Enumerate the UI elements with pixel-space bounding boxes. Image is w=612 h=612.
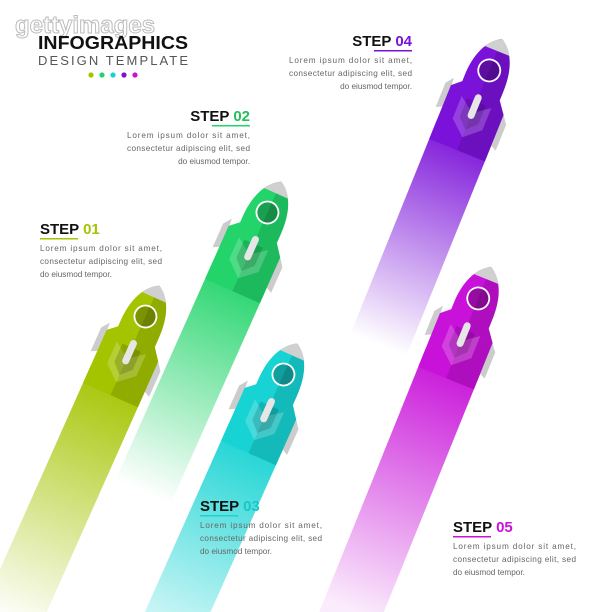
rocket 3 xyxy=(102,329,330,612)
step 05 text: consectetur adipiscing elit, sed xyxy=(453,555,576,564)
step 05 text xyxy=(453,519,576,577)
step 02 text: do eiusmod tempor. xyxy=(178,157,250,166)
step 01 text: STEP 01 xyxy=(40,221,100,238)
step 03 text xyxy=(200,498,322,556)
title xyxy=(38,33,188,78)
step 03 text: Lorem ipsum dolor sit amet, xyxy=(200,521,322,530)
step 05 text: Lorem ipsum dolor sit amet, xyxy=(453,542,576,551)
step 03 text: do eiusmod tempor. xyxy=(200,547,272,556)
title: DESIGN TEMPLATE xyxy=(38,53,188,68)
step 04 text: do eiusmod tempor. xyxy=(340,82,412,91)
step 04 text: Lorem ipsum dolor sit amet, xyxy=(289,56,412,65)
watermark: gettyimages xyxy=(15,12,155,39)
step 03 text: consectetur adipiscing elit, sed xyxy=(200,534,322,543)
step 04 text: STEP 04 xyxy=(352,33,413,50)
step 01 text xyxy=(40,221,162,279)
title: INFOGRAPHICS xyxy=(38,33,188,53)
step 04 text: consectetur adipiscing elit, sed xyxy=(289,69,412,78)
step 01 text: consectetur adipiscing elit, sed xyxy=(40,257,162,266)
step 01 text: Lorem ipsum dolor sit amet, xyxy=(40,244,162,253)
step 04 text xyxy=(289,33,413,91)
step 02 text xyxy=(127,108,250,166)
rocket 4 xyxy=(319,25,535,423)
step 05 text: STEP 05 xyxy=(453,519,513,536)
step 05 text: do eiusmod tempor. xyxy=(453,568,525,577)
rocket 1 xyxy=(0,271,192,612)
step 01 text: do eiusmod tempor. xyxy=(40,270,112,279)
step 02 text: STEP 02 xyxy=(190,108,250,125)
rocket 5 xyxy=(293,253,524,612)
step 02 text: consectetur adipiscing elit, sed xyxy=(127,144,250,153)
rocket 2 xyxy=(86,167,314,562)
step 02 text: Lorem ipsum dolor sit amet, xyxy=(127,131,250,140)
step 03 text: STEP 03 xyxy=(200,498,260,515)
